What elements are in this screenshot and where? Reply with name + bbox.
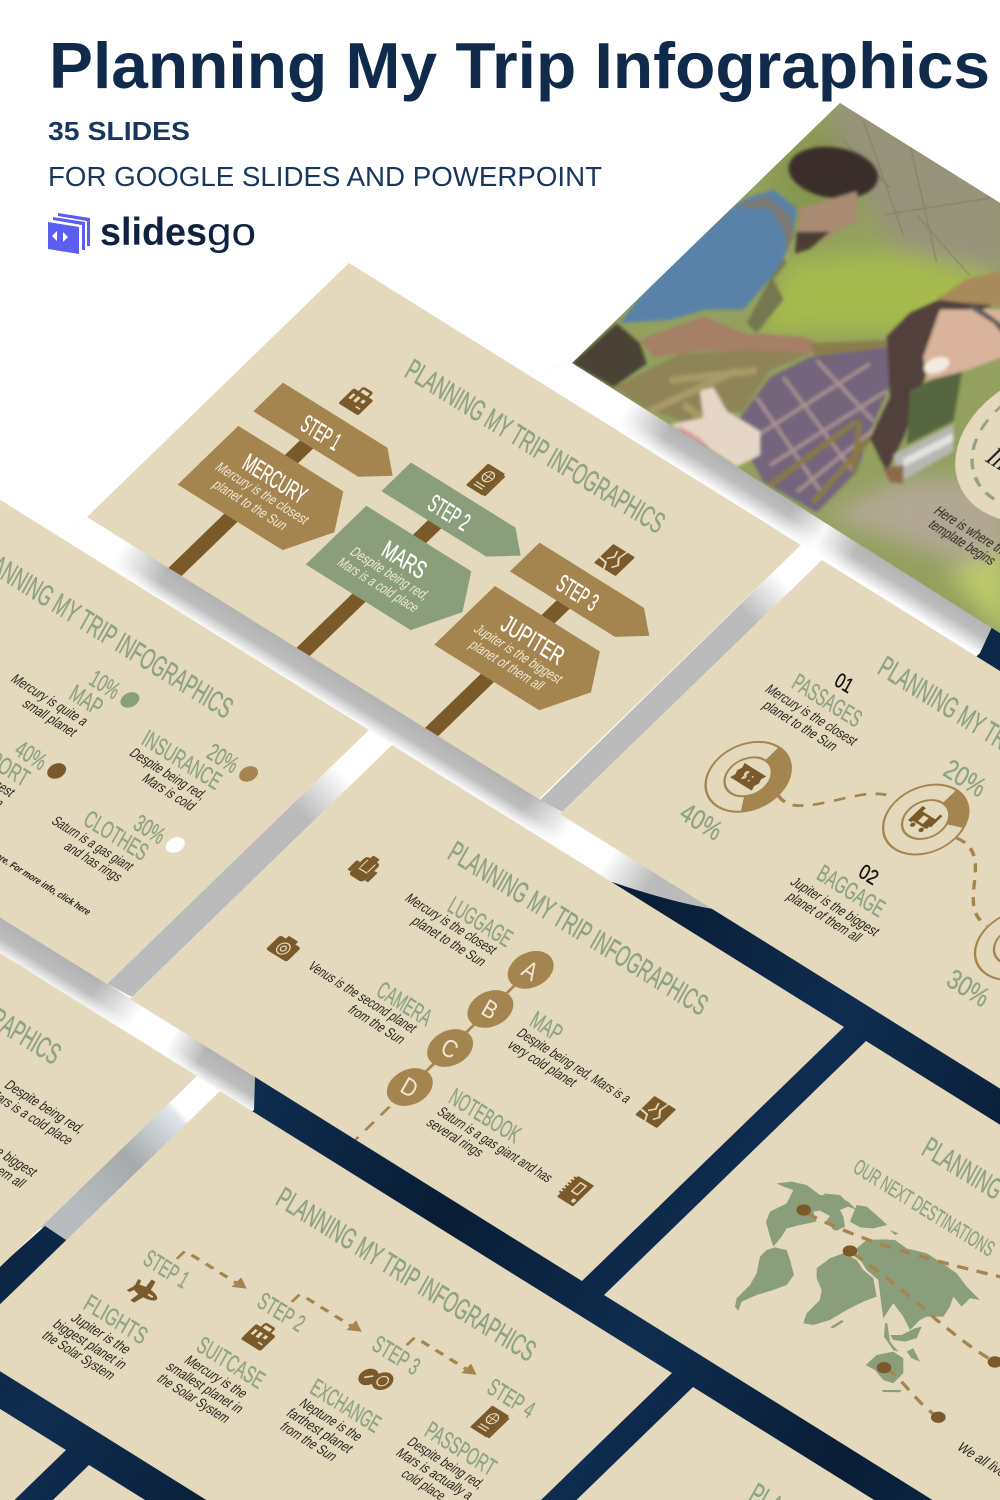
item: insurance 20%: Mars is cold <box>138 771 200 813</box>
signpost 2: Mars: MARS <box>377 535 432 584</box>
panel: timeline A-D slide <box>130 745 844 1281</box>
panel: lower-left slide <box>0 794 197 1330</box>
donut 40% <box>660 729 808 852</box>
step 2: suitcase: smallest planet in <box>163 1359 247 1416</box>
item: clothes 30%: and has rings <box>60 839 127 884</box>
panel: four steps slide <box>0 1091 672 1500</box>
slide title: PLANNING MY TRIP INFOGRAPHICS <box>400 352 671 540</box>
text: passages: 01 <box>831 669 857 699</box>
item: map 10%: small planet <box>19 696 81 739</box>
panel: bottom right slide <box>431 1387 1000 1500</box>
text: baggage: BAGGAGE <box>813 859 890 923</box>
step 4: passport: Despite being red, <box>404 1435 488 1491</box>
logo: slidesgo: go <box>207 211 256 254</box>
backpack <box>613 350 810 421</box>
step 1: flights: biggest planet in <box>49 1317 131 1372</box>
donut 40%: 40% <box>675 797 727 847</box>
timeline: B <box>477 993 503 1025</box>
timeline: D <box>396 1071 423 1104</box>
woman: shirt, hair, face, cap <box>740 347 897 512</box>
panel: passages donut slide <box>560 560 1000 1096</box>
title: Planning My Trip Infographics <box>49 29 990 102</box>
item: camera: Venus is the second planet <box>304 959 421 1035</box>
icon: layered slides <box>48 213 90 254</box>
timeline: A <box>517 954 544 987</box>
item: map: very cold planet <box>504 1038 581 1090</box>
step 2: suitcase <box>151 1267 367 1442</box>
text: baggage: 02 <box>855 860 882 890</box>
slide title: PLANNING MY TRIP INFOGRAPHICS <box>443 834 714 1022</box>
item: insurance 20%: INSURANCE <box>138 725 226 795</box>
signpost 2: Mars <box>250 434 566 697</box>
item: map: MAP <box>526 1006 567 1047</box>
step 3: exchange: STEP 3 <box>368 1330 424 1381</box>
step 1: flights: FLIGHTS <box>80 1289 152 1350</box>
step 4: passport <box>381 1366 559 1500</box>
step 2: suitcase: SUITCASE <box>192 1331 269 1394</box>
vertical gap strips <box>40 545 822 1245</box>
signpost 3: Jupiter: Jupiter is the biggest <box>470 622 567 686</box>
step 1: flights: the Solar System <box>39 1328 119 1382</box>
text: baggage <box>776 840 919 949</box>
signpost 1: Mercury: STEP 1 <box>296 409 346 456</box>
item: passport 40% <box>0 698 73 822</box>
signpost 2: Mars: Mars is a cold place <box>334 555 423 615</box>
step 3: exchange: from the Sun <box>277 1419 341 1464</box>
text: passages <box>751 648 897 759</box>
step 2: suitcase: Mercury is the <box>181 1353 251 1401</box>
donut 30%: 30% <box>942 964 994 1014</box>
signpost 1: Mercury <box>122 355 436 617</box>
shadow strip under left slide <box>0 905 270 1130</box>
item: insurance 20%: Despite being red, <box>126 746 211 802</box>
text: passages: PASSAGES <box>788 668 866 733</box>
text: passages: planet to the Sun <box>759 698 842 753</box>
cover title circle <box>928 390 1000 565</box>
signpost 3: Jupiter: STEP 3 <box>552 569 603 617</box>
panel: destinations map slide <box>604 1041 1000 1500</box>
shadow strip under signpost slide <box>50 517 730 965</box>
destination routes and pins <box>796 1204 1000 1423</box>
item: camera <box>256 920 443 1050</box>
donut 30% <box>930 897 1000 1020</box>
item: camera: from the Sun <box>345 1002 409 1047</box>
text block: Mars: Despite being red, <box>1 1078 89 1136</box>
slide title: PLANNING MY TRIP INFOGRAPHICS <box>271 1180 542 1368</box>
background branches <box>843 120 990 276</box>
signpost 1: Mercury: Mercury is the closest <box>212 460 313 527</box>
donut 20% <box>865 751 1000 868</box>
timeline: C <box>436 1032 463 1065</box>
signpost 3: Jupiter: JUPITER <box>497 609 569 670</box>
item: camera: CAMERA <box>372 976 437 1031</box>
item: notebook: Saturn is a gas giant and has <box>434 1104 557 1185</box>
item: map 10%: Mercury is quite a <box>7 671 92 729</box>
donut 20%: 20% <box>938 754 991 804</box>
text: passages: Mercury is the closest <box>762 682 862 748</box>
panel: cover photo slide <box>572 103 1000 633</box>
logo: slidesgo <box>48 211 256 254</box>
item: clothes 30%: 30% <box>129 809 170 850</box>
item: luggage: Mercury is the closest <box>401 891 501 957</box>
dashed connectors <box>777 753 1000 927</box>
timeline <box>339 944 563 1150</box>
step 3: exchange: Neptune is the <box>296 1396 366 1444</box>
subtitle: compatibility: FOR GOOGLE SLIDES AND POWERPOINT <box>48 161 602 192</box>
item: passport 40%: 40% <box>11 735 51 776</box>
item: map 10%: 10% <box>85 665 124 705</box>
item: luggage: LUGGAGE <box>444 891 517 953</box>
item: notebook: NOTEBOOK <box>445 1083 525 1149</box>
step 1: flights: Jupiter is the <box>68 1311 135 1357</box>
step 3: exchange <box>267 1310 481 1485</box>
item: clothes 30% <box>37 780 192 896</box>
shadow strip under photo <box>520 363 1000 690</box>
item: map <box>498 1006 687 1138</box>
item: map 10% <box>0 637 146 751</box>
item: clothes 30%: CLOTHES <box>79 805 153 866</box>
panel: signposts slide <box>87 263 801 799</box>
navy background area <box>0 622 1000 1500</box>
step 1: flights <box>38 1225 252 1399</box>
item: notebook: several rings <box>423 1115 488 1160</box>
signpost 2: Mars: STEP 2 <box>423 489 475 536</box>
panel: bottom left slides <box>0 1168 541 1500</box>
step 4: passport: PASSPORT <box>421 1416 501 1482</box>
item: insurance 20%: 20% <box>203 738 243 779</box>
item: notebook <box>417 1083 605 1215</box>
item: map 10%: MAP <box>65 679 108 721</box>
step 3: exchange: farthest planet <box>283 1406 357 1456</box>
item: clothes 30%: Saturn is a gas giant <box>48 814 138 874</box>
step 1: flights: STEP 1 <box>139 1244 194 1294</box>
logo: slidesgo: slides <box>100 211 207 254</box>
item: insurance 20% <box>110 708 265 825</box>
signpost 2: Mars: Despite being red, <box>346 544 434 603</box>
text: baggage: planet of them all <box>783 889 866 945</box>
man: shirt, hair, arm <box>620 190 797 323</box>
item: luggage: planet to the Sun <box>408 914 490 969</box>
signpost 1: Mercury: planet to the Sun <box>209 477 291 533</box>
step 4: passport: STEP 4 <box>483 1373 539 1424</box>
step 2: suitcase: the Solar System <box>154 1371 234 1426</box>
signpost 3: Jupiter <box>378 515 693 777</box>
signpost 3: Jupiter: planet of them all <box>466 637 548 693</box>
item: map: Despite being red, Mars is a <box>513 1026 635 1106</box>
signpost 1: Mercury: MERCURY <box>238 448 312 510</box>
step 3: exchange: EXCHANGE <box>306 1373 385 1438</box>
panel: percent list slide <box>0 448 369 984</box>
item: luggage <box>336 841 524 972</box>
world map <box>735 1182 980 1392</box>
text: baggage: Jupiter is the biggest <box>787 874 884 939</box>
subtitle: slide count: 35 SLIDES <box>48 116 190 146</box>
step 2: suitcase: STEP 2 <box>253 1287 310 1337</box>
